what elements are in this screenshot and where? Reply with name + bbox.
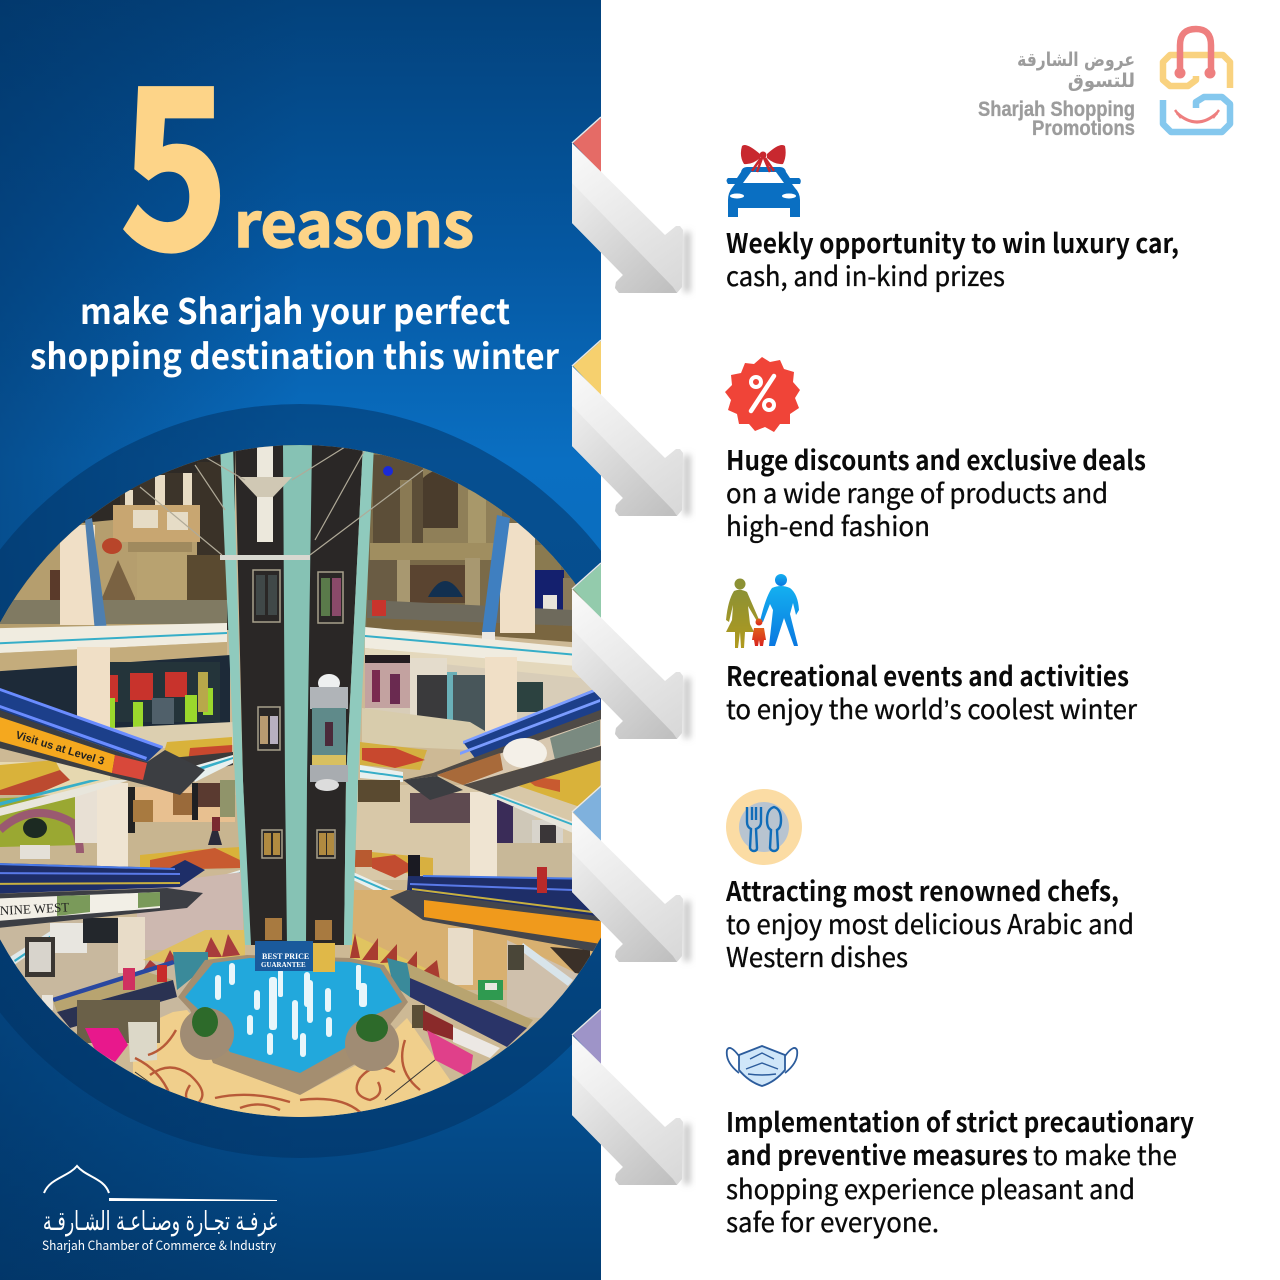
panel: blue background [0, 0, 601, 1280]
arrow 4 [572, 786, 690, 962]
icon: face mask [727, 1046, 797, 1086]
item 5 text: to make the [1033, 1134, 1177, 1173]
item 5 text: safe for everyone. [726, 1201, 939, 1240]
logo: Sharjah Chamber of Commerce [42, 1166, 277, 1254]
shops level 1 left [0, 647, 233, 750]
icon: car with bow [726, 145, 801, 217]
subheading: make Sharjah your perfect [80, 284, 510, 335]
heading: big 5: 5 [121, 0, 228, 312]
arrow 2 [572, 340, 690, 516]
logo: Sharjah Shopping Promotions: Promotions [1032, 117, 1135, 140]
level 2 escalators [0, 860, 601, 952]
item 2 text: on a wide range of products and [726, 472, 1108, 511]
item 4 text: to enjoy most delicious Arabic and [726, 903, 1134, 942]
item 2 text [726, 439, 1146, 544]
balcony bands [0, 623, 227, 655]
icon: fork and spoon plate [726, 789, 802, 865]
level 2 escalators: NINE WEST [0, 899, 70, 918]
central elevator shaft [140, 445, 423, 945]
level 2 left [0, 760, 240, 874]
item 3 text: to enjoy the world’s coolest winter [726, 688, 1137, 727]
shops level 1 right [362, 655, 600, 750]
logo: Sharjah Chamber of Commerce: غرفـة تجـارة وصنـاعـة الشـارقـة [43, 1206, 277, 1237]
photo: mall atrium [0, 440, 640, 1130]
heading: reasons: reasons [234, 175, 474, 265]
item 2 text: Huge discounts and exclusive deals [726, 439, 1146, 478]
mezzanines [164, 737, 232, 758]
item 5 text: Implementation of strict precautionary [726, 1101, 1194, 1140]
arrow 5 [572, 1009, 690, 1185]
item 1 text: cash, and in-kind prizes [726, 255, 1005, 294]
subheading [30, 284, 560, 380]
logo: Sharjah Shopping Promotions [978, 29, 1230, 140]
item 5 text: shopping experience pleasant and [726, 1168, 1135, 1207]
level 1 escalators: Visit us at Level 3 [14, 729, 106, 768]
item 2 text: high-end fashion [726, 505, 930, 544]
item 4 text: Attracting most renowned chefs, [725, 870, 1119, 909]
logo: Sharjah Shopping Promotions: Sharjah Shopping [978, 98, 1135, 121]
logo: Sharjah Shopping Promotions: عروض الشارقة [1017, 50, 1135, 71]
logo: Sharjah Shopping Promotions: للتسوق [1068, 71, 1135, 92]
arrow 1 [572, 117, 690, 293]
item 4 text: Western dishes [726, 936, 908, 975]
icon: family [726, 574, 799, 648]
pool [178, 955, 408, 1095]
logo: Sharjah Chamber of Commerce: Sharjah Chamber of Commerce & Industry [42, 1235, 276, 1254]
upper level right [365, 451, 587, 642]
ground level [0, 872, 632, 1047]
item 1 text [726, 222, 1179, 294]
arrow 3 [572, 563, 690, 739]
guarantee sign [255, 941, 335, 972]
item 5 text [726, 1101, 1194, 1240]
level 1 escalators [0, 688, 601, 800]
level 2 right [354, 760, 601, 890]
item 4 text [725, 870, 1134, 975]
icon: discount badge [725, 357, 800, 432]
guarantee sign: BEST PRICE [262, 952, 309, 961]
item 3 text: Recreational events and activities [726, 655, 1129, 694]
guarantee sign: GUARANTEE [261, 961, 306, 969]
fountain floor [77, 1000, 500, 1125]
item 3 text [726, 655, 1137, 727]
item 5 text: and preventive measures [726, 1134, 1028, 1173]
upper level left [0, 451, 235, 630]
item 1 text: Weekly opportunity to win luxury car, [726, 222, 1179, 261]
subheading: shopping destination this winter [30, 329, 560, 380]
